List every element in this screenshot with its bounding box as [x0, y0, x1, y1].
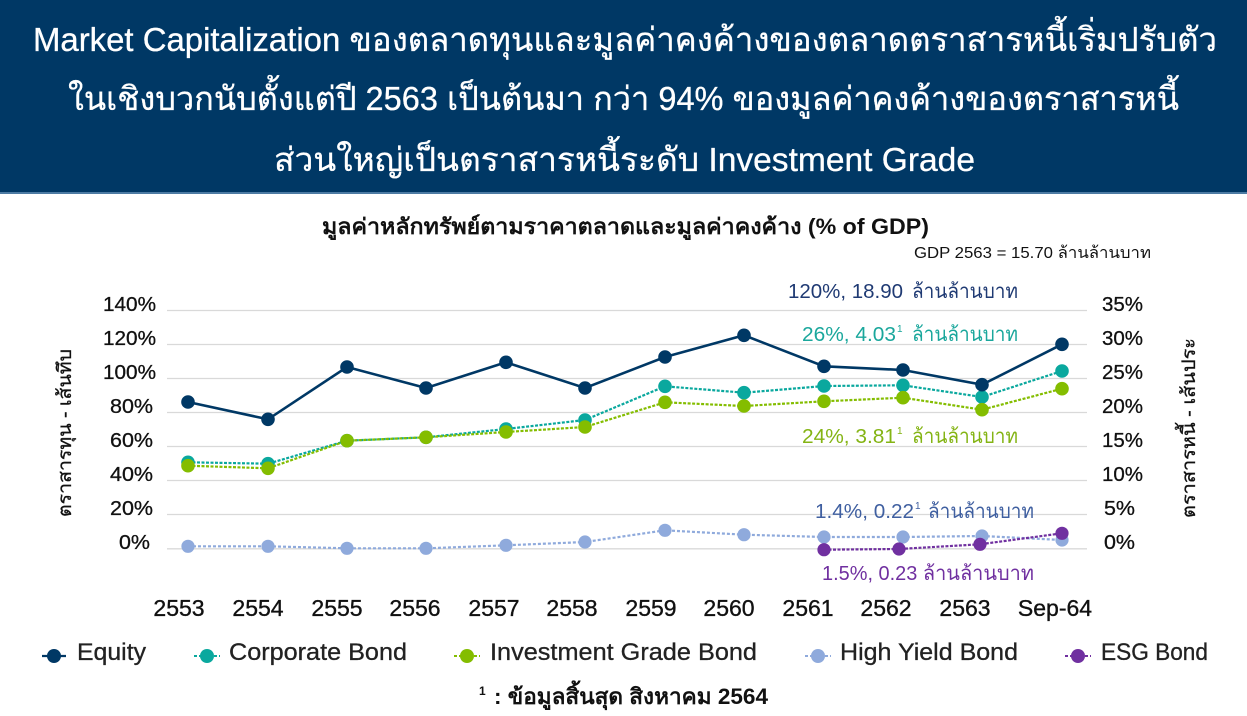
x axis labels: 2562 — [860, 595, 912, 621]
x axis labels: 2556 — [389, 595, 441, 621]
title banner: ส่วนใหญ่เป็นตราสารหนี้ระดับ Investment Grade — [274, 136, 975, 178]
legend: equity: Equity — [77, 639, 146, 666]
left axis labels — [103, 294, 156, 554]
series: corporate bond — [181, 364, 1069, 471]
left axis labels: 140% — [103, 294, 156, 316]
x axis labels: 2557 — [468, 595, 520, 621]
x axis labels: 2561 — [782, 595, 834, 621]
callout: ESG bond: 1.5%, 0.23 ล้านล้านบาท — [822, 563, 1034, 585]
x axis labels: 2553 — [153, 595, 205, 621]
right axis labels: 10% — [1102, 464, 1143, 486]
left axis labels: 120% — [103, 328, 156, 350]
right axis labels: 20% — [1102, 396, 1143, 418]
GDP note: GDP 2563 = 15.70 ล้านล้านบาท — [914, 244, 1151, 262]
callout: corporate bond: ล้านล้านบาท — [912, 324, 1018, 346]
x axis labels: 2559 — [625, 595, 677, 621]
callout: investment grade bond: ล้านล้านบาท — [912, 426, 1018, 448]
legend: investment grade bond: Investment Grade Bond — [490, 639, 757, 666]
legend: equity — [42, 639, 146, 666]
series: equity — [181, 328, 1069, 426]
left axis labels: 20% — [110, 498, 153, 520]
legend: ESG bond: ESG Bond — [1101, 639, 1208, 666]
title banner: Market Capitalization ของตลาดทุนและมูลค่าคงค้างของตลาดตราสารหนี้เริ่มปรับตัว — [33, 16, 1217, 60]
right axis labels: 35% — [1102, 294, 1143, 316]
footnote: 1 — [479, 684, 486, 698]
x axis labels: 2563 — [939, 595, 991, 621]
callout: high yield bond — [815, 501, 1034, 523]
series: investment grade bond — [181, 382, 1069, 475]
right axis labels: 0% — [1104, 532, 1135, 554]
x axis labels: 2558 — [546, 595, 598, 621]
series: high yield bond — [181, 524, 1069, 555]
callout: corporate bond: 1 — [897, 324, 903, 335]
right axis labels: 30% — [1102, 328, 1143, 350]
right axis labels: 25% — [1102, 362, 1143, 384]
title banner: ในเชิงบวกนับตั้งแต่ปี 2563 เป็นต้นมา กว่า 94% ของมูลค่าคงค้างของตราสารหนี้ — [68, 75, 1180, 119]
callout: corporate bond — [802, 324, 1018, 346]
callout: equity — [788, 281, 1018, 303]
callout: high yield bond: 1 — [915, 501, 921, 512]
title banner — [0, 0, 1247, 194]
left axis labels: 40% — [110, 464, 153, 486]
legend — [42, 639, 1208, 666]
callout: high yield bond: ล้านล้านบาท — [928, 501, 1034, 523]
right axis labels: 5% — [1104, 498, 1135, 520]
callout: equity: 120%, 18.90 — [788, 281, 903, 303]
x axis labels: 2554 — [232, 595, 284, 621]
left axis labels: 100% — [103, 362, 156, 384]
right axis labels — [1102, 294, 1143, 554]
x axis labels — [153, 595, 1092, 621]
left axis labels: 60% — [110, 430, 153, 452]
left axis title: ตราสารทุน - เส้นทึบ — [55, 349, 77, 517]
legend: high yield bond: High Yield Bond — [840, 639, 1018, 666]
footnote: : ข้อมูลสิ้นสุด สิงหาคม 2564 — [494, 680, 769, 711]
callout: investment grade bond: 1 — [897, 426, 903, 437]
series: ESG bond — [817, 527, 1069, 556]
right axis labels: 15% — [1102, 430, 1143, 452]
callout: high yield bond: 1.4%, 0.22 — [815, 501, 914, 523]
x axis labels: 2560 — [703, 595, 755, 621]
left axis labels: 0% — [119, 532, 150, 554]
left axis labels: 80% — [110, 396, 153, 418]
callout: equity: ล้านล้านบาท — [912, 281, 1018, 303]
callout: investment grade bond — [802, 426, 1018, 448]
line chart — [55, 294, 1200, 621]
legend: corporate bond: Corporate Bond — [229, 639, 407, 666]
x axis labels: 2555 — [311, 595, 363, 621]
callout: corporate bond: 26%, 4.03 — [802, 324, 896, 346]
callout: investment grade bond: 24%, 3.81 — [802, 426, 896, 448]
x axis labels: Sep-64 — [1018, 595, 1092, 621]
right axis title: ตราสารหนี้ - เส้นประ — [1175, 338, 1200, 518]
chart title: มูลค่าหลักทรัพย์ตามราคาตลาดและมูลค่าคงค้าง (% of GDP) — [322, 214, 929, 241]
